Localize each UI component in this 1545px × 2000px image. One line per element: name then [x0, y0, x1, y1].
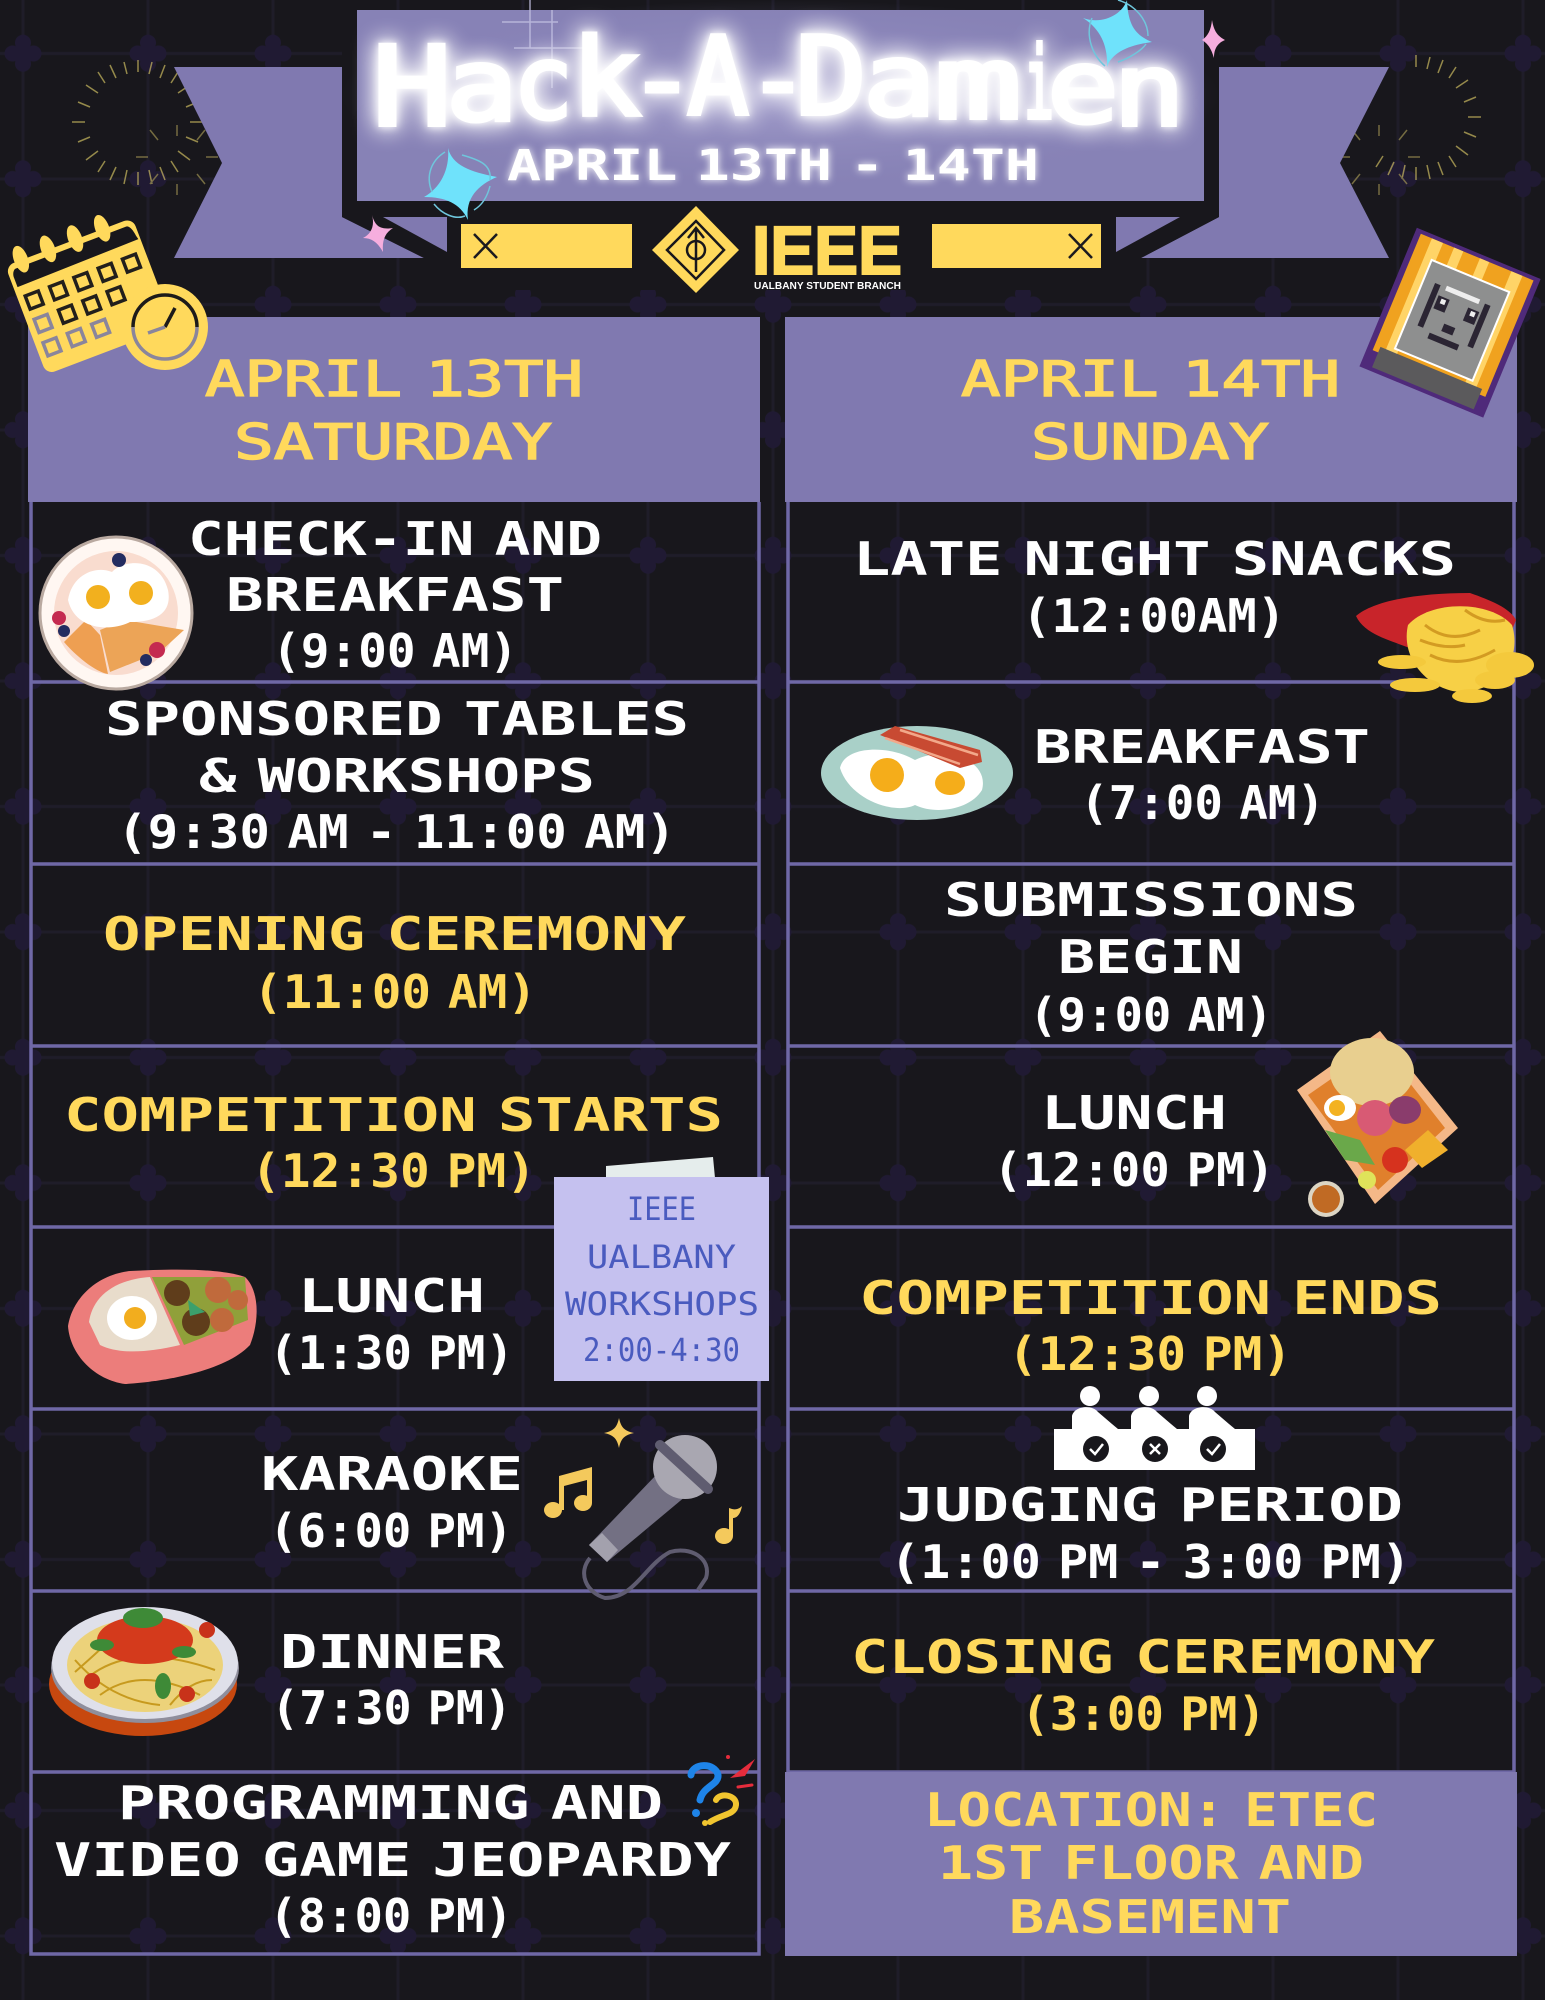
row: competition ends [859, 1271, 1442, 1381]
cross sparkle [502, 0, 590, 88]
panel: location: BASEMENT [1009, 1890, 1291, 1944]
fireworks left [72, 60, 218, 195]
row: lunch sunday [993, 1086, 1275, 1197]
IEEE logo: UALBANY STUDENT BRANCH [754, 281, 901, 292]
icon: calendar and clock [0, 204, 208, 375]
row: late night snacks [853, 532, 1456, 643]
row: late night snacks: LATE NIGHT SNACKS [853, 532, 1456, 586]
row: sponsored tables: & WORKSHOPS [199, 749, 595, 803]
icon: sparkle star [604, 1418, 634, 1448]
icon: lunch box [1297, 1031, 1458, 1217]
row: submissions begin: (9:00 AM) [1029, 988, 1273, 1042]
icon: bag of chips [1356, 593, 1534, 703]
row: submissions begin: BEGIN [1058, 930, 1243, 984]
row: breakfast sunday: BREAKFAST [1034, 720, 1370, 774]
panel: sunday header [785, 317, 1517, 502]
row: closing ceremony [851, 1630, 1435, 1741]
sticky note: workshops: 2:00-4:30 [583, 1331, 740, 1369]
title [372, 15, 1185, 151]
row: closing ceremony: CLOSING CEREMONY [851, 1630, 1435, 1684]
icon: question marks and confetti [691, 1755, 755, 1826]
icon: microphone [584, 1435, 717, 1598]
panel: saturday header [28, 317, 760, 502]
title: e [1047, 28, 1119, 147]
row: dinner [271, 1625, 512, 1735]
row: judging period [890, 1478, 1411, 1589]
icon: spaghetti plate [49, 1607, 239, 1736]
title: c [513, 24, 573, 143]
row: competition starts: COMPETITION STARTS [64, 1088, 723, 1142]
row: judging period: JUDGING PERIOD [897, 1478, 1403, 1532]
ribbon right [1141, 67, 1389, 258]
panel: sunday header: APRIL 14TH [961, 351, 1340, 408]
sticky note: workshops: WORKSHOPS [565, 1285, 759, 1323]
row: dinner: DINNER [280, 1625, 504, 1679]
icon: breakfast plate with eggs and toast [40, 537, 192, 689]
title: i [1024, 25, 1054, 142]
title panel [340, 0, 1220, 201]
row: jeopardy: VIDEO GAME JEOPARDY [54, 1833, 731, 1887]
icon: bento lunch [68, 1270, 257, 1384]
row: jeopardy: (8:00 PM) [269, 1889, 513, 1943]
row: opening ceremony: OPENING CEREMONY [103, 907, 686, 961]
title: k [571, 17, 641, 141]
sparkle cyan lower left [424, 148, 497, 220]
row: lunch saturday: (1:30 PM) [269, 1326, 514, 1380]
panel: location: 1ST FLOOR AND [938, 1836, 1364, 1890]
title: - [747, 22, 809, 139]
row: sponsored tables [105, 692, 689, 859]
row: competition ends: COMPETITION ENDS [859, 1271, 1442, 1325]
row: late night snacks: (12:00AM) [1022, 589, 1286, 643]
row: karaoke [261, 1447, 523, 1558]
row: judging period: (1:00 PM - 3:00 PM) [890, 1535, 1411, 1589]
row: dinner: (7:30 PM) [271, 1681, 512, 1735]
fold shape left [383, 217, 447, 252]
title: - [627, 22, 697, 139]
row: check-in and breakfast [188, 512, 602, 678]
title: a [446, 27, 518, 144]
row: submissions begin: SUBMISSIONS [944, 873, 1358, 927]
panel: location: LOCATION: ETEC [924, 1783, 1378, 1837]
row: jeopardy: PROGRAMMING AND [118, 1776, 663, 1830]
title: a [863, 22, 936, 139]
row: lunch sunday: (12:00 PM) [993, 1143, 1275, 1197]
subtitle: APRIL 13TH - 14TH [507, 141, 1039, 191]
icon: eggs and bacon plate [821, 726, 1013, 820]
row: lunch sunday: LUNCH [1041, 1086, 1227, 1140]
row: opening ceremony [103, 907, 686, 1019]
row: closing ceremony: (3:00 PM) [1021, 1687, 1266, 1741]
IEEE logo: IEEE [752, 212, 902, 289]
panel: location [785, 1772, 1517, 1956]
row: karaoke: (6:00 PM) [269, 1504, 513, 1558]
panel: sunday schedule frame [788, 502, 1514, 1772]
row: check-in and breakfast: (9:00 AM) [272, 624, 518, 678]
row: sponsored tables: (9:30 AM - 11:00 AM) [117, 805, 676, 859]
title: n [1113, 32, 1185, 149]
row: submissions begin [944, 873, 1358, 1042]
IEEE logo [652, 206, 902, 293]
title: A [687, 15, 749, 140]
title: D [795, 15, 867, 140]
icon: judges panel [1054, 1386, 1255, 1470]
sticky note: workshops [554, 1157, 769, 1381]
row: competition starts [64, 1088, 723, 1198]
icon: music notes [544, 1467, 742, 1544]
row: lunch saturday: LUNCH [298, 1269, 485, 1323]
panel: saturday header: APRIL 13TH [205, 351, 583, 408]
fireworks right [1338, 55, 1481, 195]
sparkle pink top right [1202, 20, 1225, 58]
sticky note: workshops: UALBANY [587, 1238, 736, 1276]
row: check-in and breakfast: CHECK-IN AND [188, 512, 602, 566]
row: breakfast sunday [1034, 720, 1370, 830]
panel: saturday header: SATURDAY [234, 414, 552, 471]
yellow tag right [932, 224, 1101, 268]
row: lunch saturday [269, 1269, 514, 1380]
row: sponsored tables: SPONSORED TABLES [105, 692, 689, 746]
ribbon shadows [342, 30, 1219, 290]
sticky note: workshops: IEEE [627, 1190, 696, 1228]
title: H [372, 23, 452, 151]
sparkle pink lower left [363, 215, 393, 252]
row: competition ends: (12:30 PM) [1008, 1327, 1292, 1381]
panel: saturday schedule frame [31, 502, 759, 1954]
icon: pixel trading card [1359, 228, 1541, 418]
row: check-in and breakfast: BREAKFAST [226, 568, 564, 622]
row: jeopardy [54, 1776, 731, 1943]
ribbon left [174, 67, 424, 258]
panel: sunday header: SUNDAY [1031, 414, 1269, 471]
fold shape right [1116, 217, 1180, 252]
yellow tag left [461, 224, 632, 268]
title: m [934, 25, 1022, 142]
row: breakfast sunday: (7:00 AM) [1080, 776, 1325, 830]
row: opening ceremony: (11:00 AM) [253, 965, 537, 1019]
row: competition starts: (12:30 PM) [251, 1144, 536, 1198]
row: karaoke: KARAOKE [261, 1447, 523, 1501]
sparkle cyan top right [1083, 0, 1152, 67]
